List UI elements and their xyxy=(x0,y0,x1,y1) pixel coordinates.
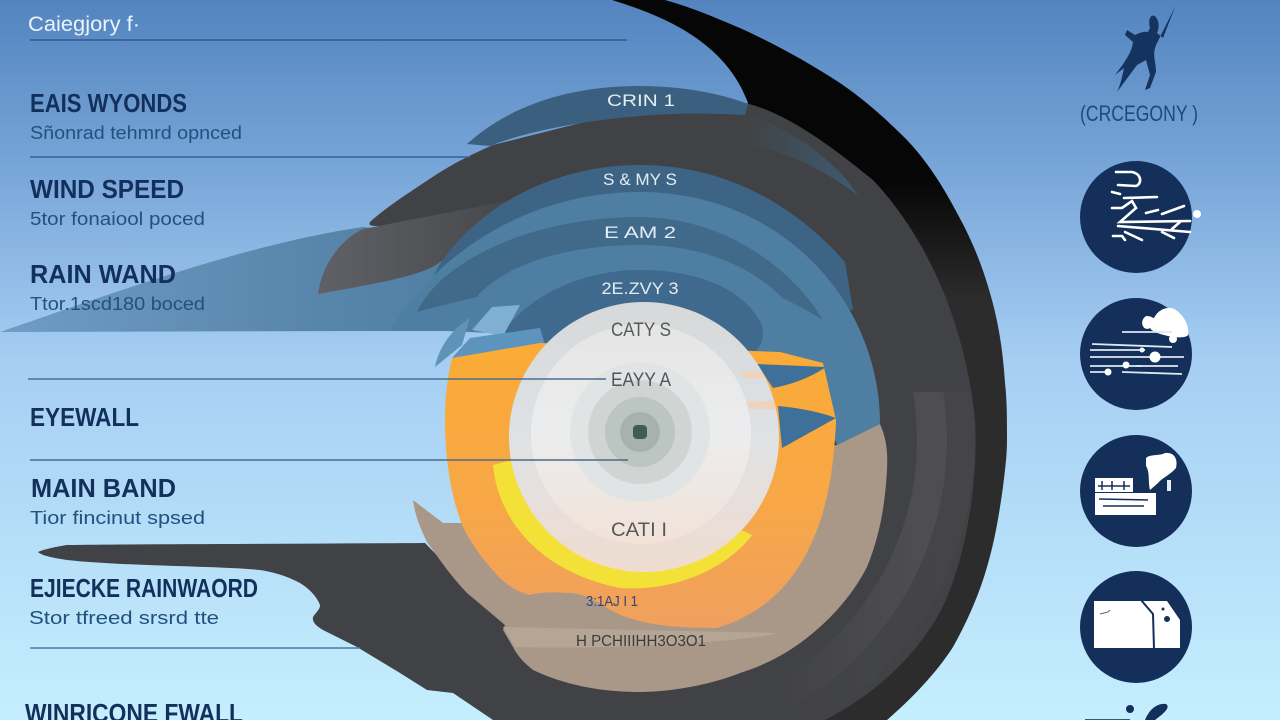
yellow crescent xyxy=(493,460,752,588)
left legend xyxy=(25,13,258,720)
blue wedge over orange xyxy=(757,364,826,388)
eye outer disk xyxy=(509,302,779,572)
eye concentric rings xyxy=(570,362,710,502)
legend item: main band xyxy=(30,473,205,528)
ring labels: CRIN 1 xyxy=(607,91,675,110)
legend item: eais wyonds xyxy=(30,88,242,143)
top blue band xyxy=(467,86,748,146)
ring labels: CATY S xyxy=(611,320,671,341)
blue band four xyxy=(478,245,824,362)
legend item: wind speed: 5tor fonaiool poced xyxy=(30,209,205,229)
blue band three xyxy=(417,217,823,320)
legend item: eais wyonds: Sñonrad tehmrd opnced xyxy=(30,123,242,143)
hurricane diagram xyxy=(0,0,1007,720)
ring labels: EAYY A xyxy=(611,370,671,391)
lower right lighter ring panel xyxy=(868,392,947,646)
icon: rain cloud xyxy=(1080,298,1192,410)
ring labels: S & MY S xyxy=(603,170,677,189)
tan outer disk xyxy=(413,424,887,692)
legend item: main band: MAIN BAND xyxy=(31,473,176,503)
blue fin over orange right xyxy=(778,406,836,448)
blue main disk xyxy=(390,192,880,445)
legend item: rain wand: RAIN WAND xyxy=(30,259,176,289)
leader lines xyxy=(28,40,628,648)
legend item: ejiecke rainword: EJIECKE RAINWAORD xyxy=(30,573,258,603)
legend item: rain wand xyxy=(30,259,205,314)
orange ring xyxy=(445,343,836,628)
faded blue band extension xyxy=(745,114,858,195)
legend item: wind speed xyxy=(30,174,205,229)
dark grey body with lower tail xyxy=(38,103,976,720)
eye centre xyxy=(633,425,647,439)
ring labels: 3:1AJ I 1 xyxy=(586,593,638,610)
ring labels: H PCHIIIHH3O3O1 xyxy=(576,633,706,650)
blue band five xyxy=(505,270,763,355)
lower right darker ring panel xyxy=(319,119,961,720)
legend item: eais wyonds: EAIS WYONDS xyxy=(30,88,187,118)
legend item: ejiecke rainword: Stor tfreed srsrd tte xyxy=(29,608,219,628)
ring labels: CATI I xyxy=(611,520,667,541)
far-left pale blue wedge xyxy=(0,227,480,332)
legend item: wind speed: WIND SPEED xyxy=(30,174,184,204)
legend item: rain wand: Ttor.1scd180 boced xyxy=(30,294,205,314)
legend item: ejiecke rainword xyxy=(29,573,258,628)
tan strip xyxy=(503,627,778,648)
icon: damaged building xyxy=(1080,435,1192,547)
ring labels xyxy=(576,91,706,650)
right icon column xyxy=(1080,7,1201,720)
icon: wind xyxy=(1080,161,1201,273)
upper dark grey wing and arch xyxy=(369,108,650,230)
icon caption: (CRCEGONY ) xyxy=(1080,101,1198,126)
legend title: Caiegjory f· xyxy=(28,13,140,36)
legend item: eyewall: EYEWALL xyxy=(30,402,139,432)
icon: flying figure xyxy=(1115,7,1175,92)
dark blue band two xyxy=(420,165,853,310)
icon: broken wall xyxy=(1080,571,1192,683)
eye middle disk xyxy=(531,324,751,544)
outer black crescent xyxy=(600,0,1007,720)
ring labels: 2E.ZVY 3 xyxy=(602,279,678,298)
ring labels: E AM 2 xyxy=(604,223,676,242)
lower grey wing xyxy=(318,200,540,294)
legend item: main band: Tior fincinut spsed xyxy=(30,508,205,528)
peach stripes on eye xyxy=(740,371,776,410)
icon: partial bottom icon xyxy=(1085,704,1168,720)
pale blue fins xyxy=(435,305,545,367)
